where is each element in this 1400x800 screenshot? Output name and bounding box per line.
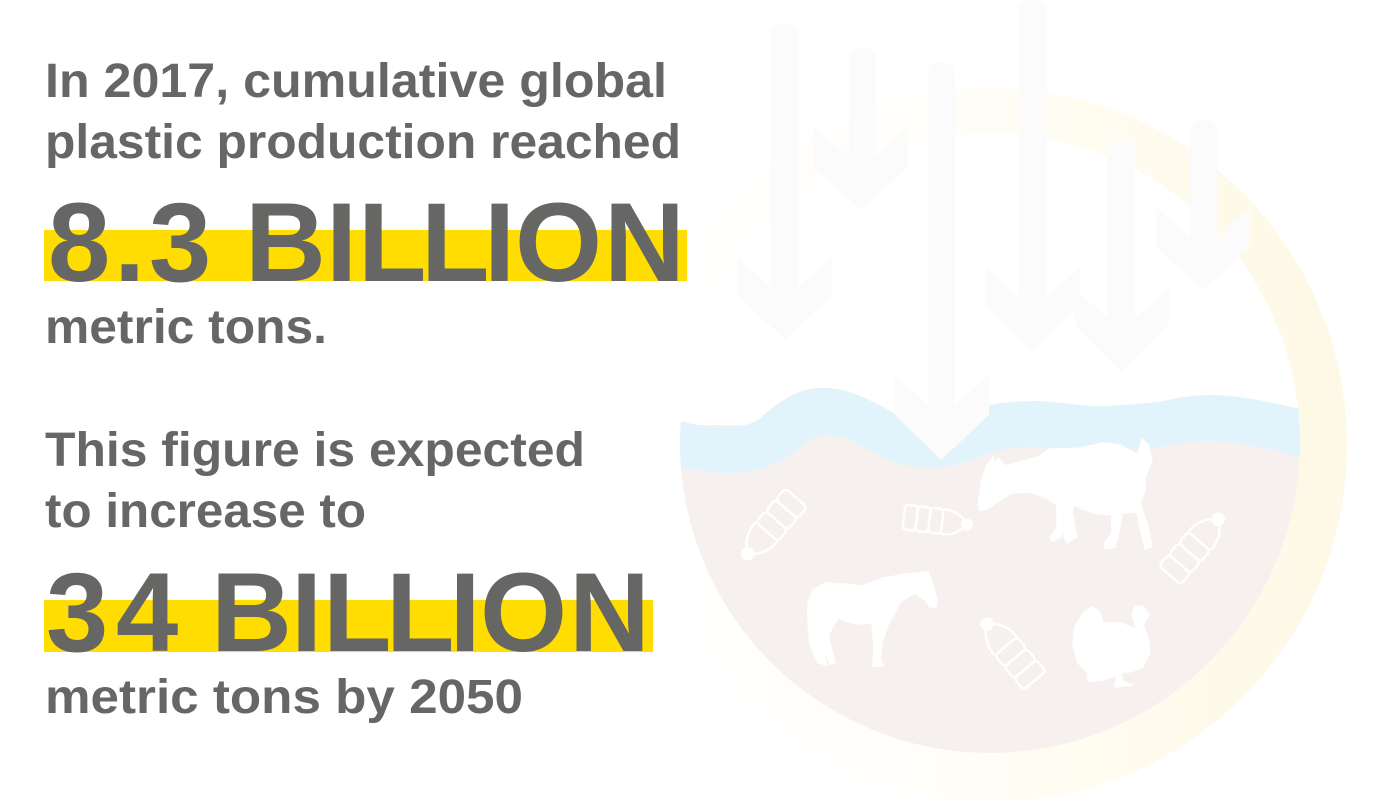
plastic bottle 4 — [972, 610, 1046, 690]
yellow highlight band — [44, 600, 653, 652]
unit label: metric tons by 2050 — [45, 671, 523, 724]
big figure: 34 billion: 34 BILLION — [46, 550, 650, 675]
illustration: plastic sinking into soil and water — [680, 88, 1347, 800]
arrow 3 — [895, 62, 989, 460]
plastic bottle 2 — [902, 504, 973, 538]
water band — [670, 388, 1310, 473]
arrow 5 — [1075, 140, 1169, 372]
arrow 6 — [1156, 120, 1250, 290]
intro sentence: plastic production reached — [45, 116, 681, 169]
yellow highlight band — [44, 230, 687, 281]
soil half circle — [680, 425, 1300, 760]
arrow 2 — [813, 47, 908, 210]
plastic bottle 3 — [1159, 506, 1233, 585]
turkey silhouette — [1073, 606, 1150, 687]
projection sentence: to increase to — [45, 485, 366, 538]
goat silhouette — [978, 439, 1152, 549]
arrow 1 — [737, 23, 832, 340]
unit label: metric tons. — [45, 301, 327, 354]
intro sentence: In 2017, cumulative global — [45, 55, 667, 108]
intro sentence — [45, 55, 681, 169]
horse silhouette — [808, 572, 937, 666]
yellow ring around the circle — [633, 88, 1347, 800]
big figure: 8.3 billion: 8.3 BILLION — [48, 180, 685, 305]
plastic bottle 1 — [733, 488, 807, 567]
text block: 2050 projection — [44, 424, 653, 724]
text block: 2017 production — [44, 55, 687, 354]
projection sentence: This figure is expected — [45, 424, 585, 477]
arrow 4 — [986, 0, 1080, 352]
projection sentence — [45, 424, 585, 538]
